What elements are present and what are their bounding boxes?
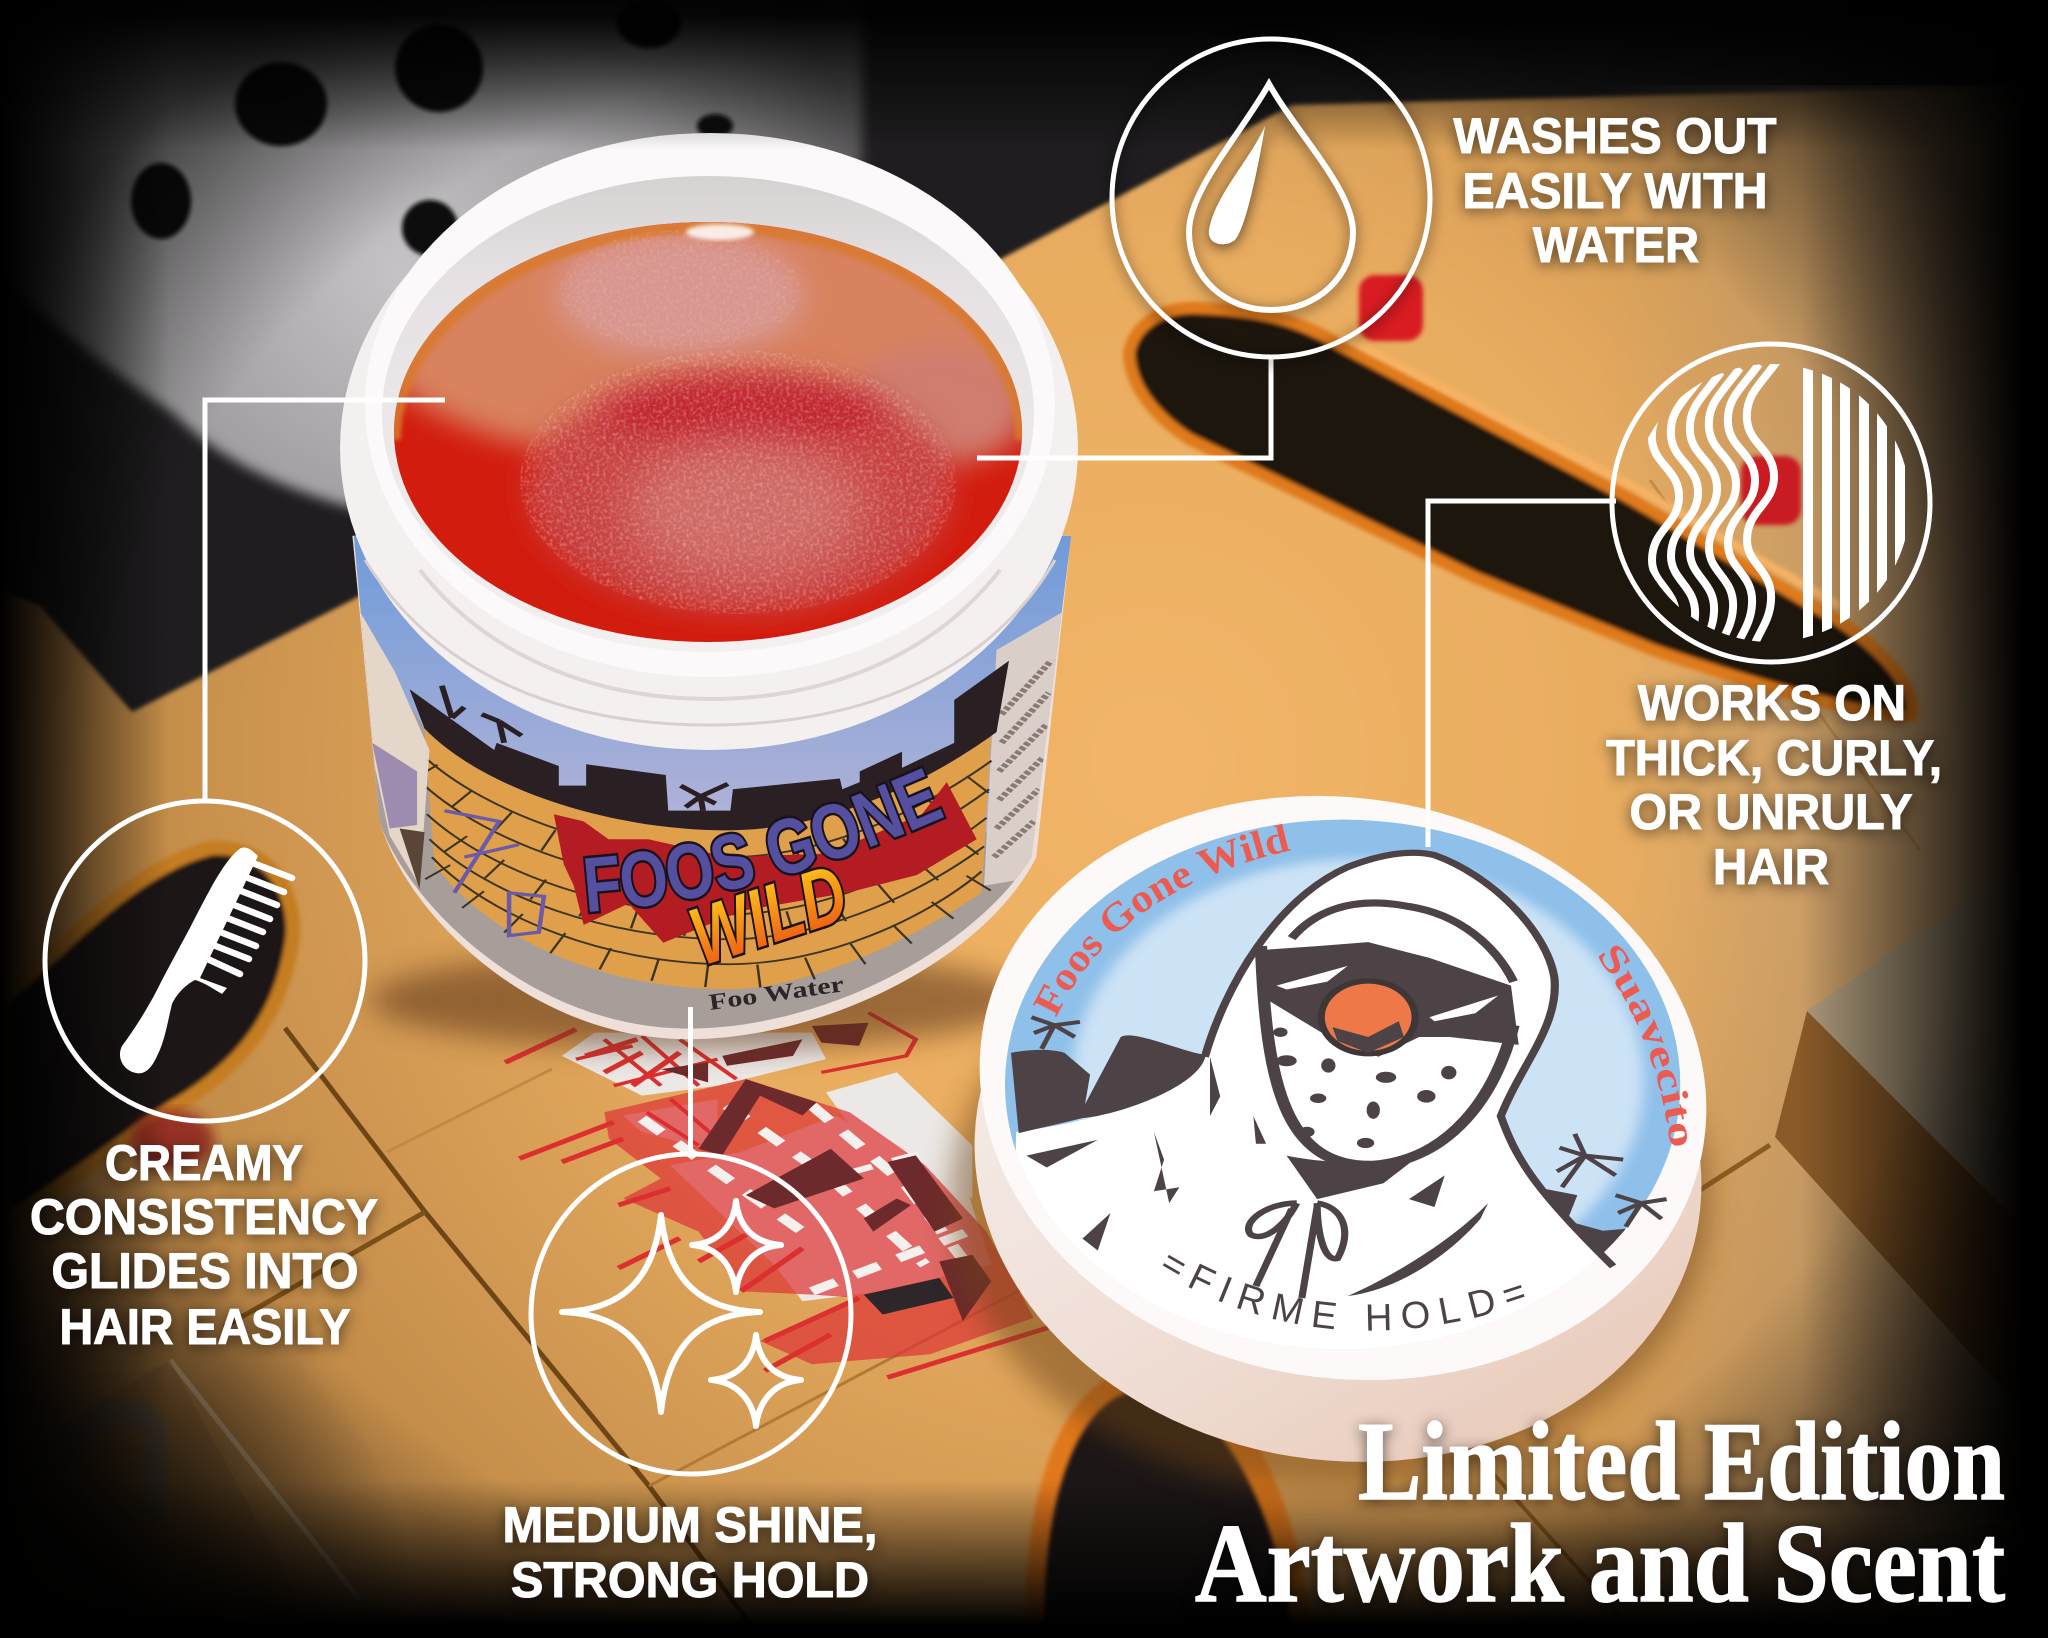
text: washes out easily with water bbox=[1454, 108, 1776, 273]
text: works on thick, curly, or unruly hair bbox=[1606, 675, 1942, 895]
text: creamy consistency glides into hair easily: CREAMY bbox=[105, 1135, 303, 1191]
lid side wall bbox=[931, 817, 1745, 1513]
lid text: Foos Gone Wild: Foos Gone Wild bbox=[1033, 824, 1291, 1017]
hockey mask face bbox=[1261, 994, 1503, 1158]
cartoon character bbox=[357, 607, 429, 889]
table panels and seams bbox=[0, 480, 1920, 1638]
red orange eye bbox=[1321, 981, 1415, 1054]
skateboard deck: left under comb bbox=[0, 848, 293, 1225]
lid text: Firme Hold: =FIRME HOLD= bbox=[1162, 1254, 1525, 1331]
mask band and hair bbox=[1261, 942, 1519, 1057]
jar body and label artwork bbox=[350, 536, 1071, 1039]
skateboard deck: top right with red wheels bbox=[1129, 275, 1912, 716]
palm trees bbox=[1031, 1017, 1667, 1227]
icon: wavy and straight hair bbox=[1612, 344, 1930, 670]
text: creamy consistency glides into hair easily bbox=[30, 1135, 378, 1355]
icon: water drop bbox=[1112, 39, 1430, 357]
text: works on thick, curly, or unruly hair: THICK, CURLY, bbox=[1606, 730, 1942, 786]
skateboard deck: bottom center bbox=[1025, 1366, 1312, 1638]
callout: works on hair bbox=[1606, 344, 1942, 895]
callout: shine and hold bbox=[502, 1154, 878, 1608]
lid printed artwork bbox=[1005, 820, 1705, 1373]
callout: creamy consistency bbox=[30, 801, 378, 1355]
text: works on thick, curly, or unruly hair: HAIR bbox=[1713, 839, 1829, 895]
pomade jar bbox=[340, 133, 1078, 1040]
text: creamy consistency glides into hair easily: HAIR EASILY bbox=[60, 1299, 350, 1355]
neck, bow and collar speckles bbox=[1287, 1156, 1419, 1199]
tag scribble bbox=[444, 811, 544, 936]
palm tree bbox=[442, 686, 728, 811]
right wooden block bbox=[1775, 850, 2048, 1420]
hood outline bbox=[1205, 853, 1613, 1266]
text: medium shine, strong hold: MEDIUM SHINE, bbox=[502, 1497, 878, 1553]
city skyline bbox=[410, 661, 1009, 830]
shadow under jar bbox=[370, 950, 1030, 1050]
mask holes bbox=[1273, 1028, 1456, 1148]
shadow under lid bbox=[950, 910, 1710, 1490]
lid top rim bbox=[937, 744, 1749, 1432]
text: creamy consistency glides into hair easily: CONSISTENCY bbox=[30, 1189, 378, 1245]
jar lip bbox=[365, 133, 1055, 677]
text: creamy consistency glides into hair easily: GLIDES INTO bbox=[52, 1243, 358, 1299]
paint splatter bbox=[554, 782, 977, 943]
backdrop: perforated white mask bbox=[0, 0, 862, 520]
icon: comb bbox=[45, 801, 365, 1121]
text: washes out easily with water: EASILY WITH bbox=[1462, 163, 1768, 219]
jar collar bbox=[340, 146, 1078, 750]
text: washes out easily with water: WATER bbox=[1533, 217, 1699, 273]
jar inner wall bbox=[382, 176, 1034, 652]
brick wall bbox=[425, 729, 992, 989]
jar lid bbox=[974, 796, 1706, 1462]
headline: limited edition artwork and scent bbox=[1195, 1400, 2005, 1626]
table right side tint bbox=[1600, 85, 2048, 1638]
skateboard deck graphic: red and white print bbox=[505, 1013, 1048, 1378]
text: works on thick, curly, or unruly hair: WORKS ON bbox=[1638, 675, 1906, 731]
callout leader lines bbox=[205, 357, 1616, 1155]
label brand: Wild: WILD bbox=[679, 848, 858, 983]
label: Foo Water: Foo Water bbox=[707, 971, 845, 1015]
text: medium shine, strong hold: STRONG HOLD bbox=[511, 1552, 869, 1608]
icon: sparkles bbox=[531, 1154, 851, 1474]
text: works on thick, curly, or unruly hair: OR UNRULY bbox=[1630, 784, 1912, 840]
pomade product surface bbox=[394, 222, 1022, 642]
callout: washes out bbox=[1112, 39, 1776, 357]
lid text: Suavecito: Suavecito bbox=[1598, 946, 1688, 1146]
label brand: Foos Gone: FOOS GONE bbox=[582, 765, 947, 914]
text: medium shine, strong hold bbox=[502, 1497, 878, 1608]
text: washes out easily with water: WASHES OUT bbox=[1454, 108, 1776, 164]
